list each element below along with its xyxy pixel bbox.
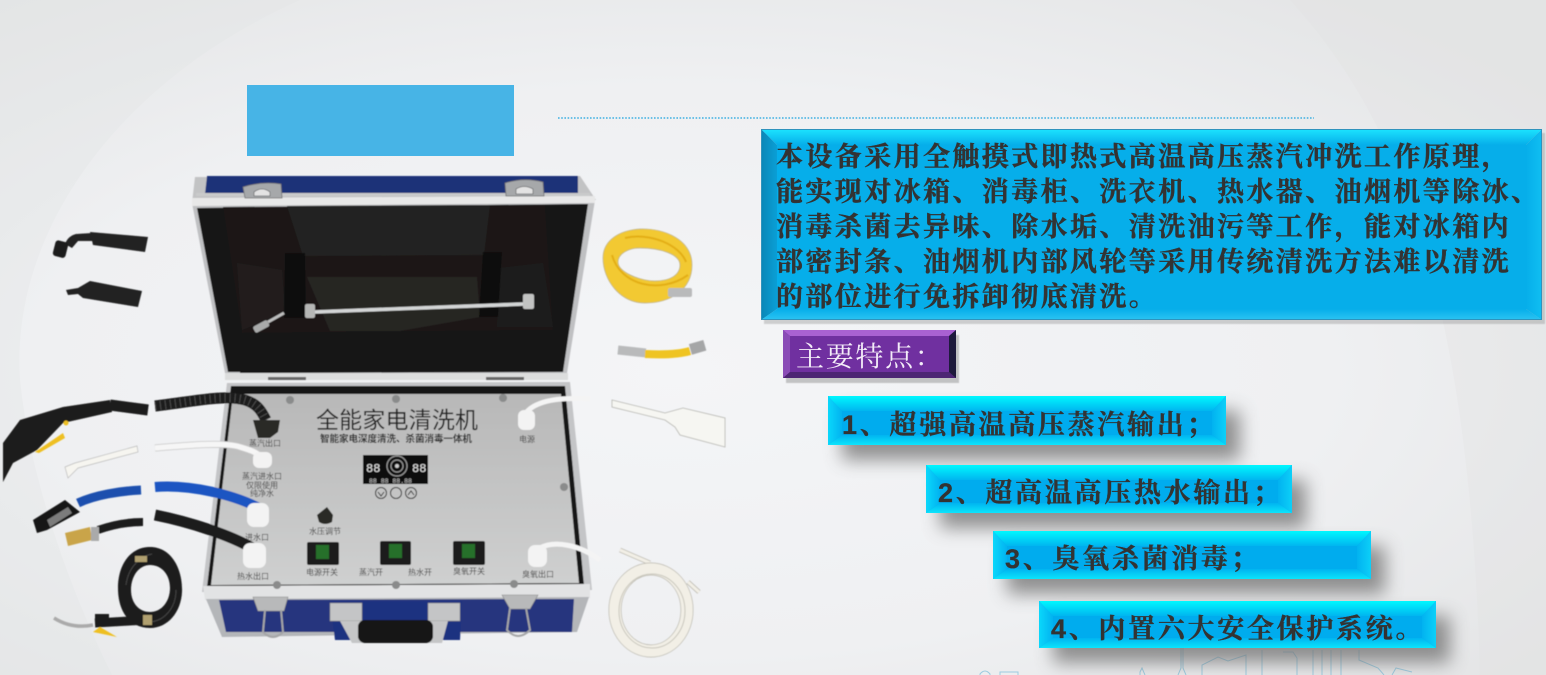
panel labels: 蒸汽出口 xyxy=(249,438,281,448)
heading: main features xyxy=(783,330,959,383)
panel: description xyxy=(761,129,1545,324)
LCD display: 88 88 88.88 xyxy=(369,478,412,485)
feature 1 xyxy=(828,396,1240,460)
feature 4: 4、内置六大安全保护系统。 xyxy=(1051,614,1425,644)
hoses into panel xyxy=(155,398,600,560)
accessory: water filter with blue hose xyxy=(33,490,141,533)
feature 3 xyxy=(993,531,1385,594)
panel labels: 电源 xyxy=(519,434,535,444)
water pressure knob xyxy=(317,507,333,524)
LCD display xyxy=(363,455,428,485)
feature 2: 2、超高温高压热水输出； xyxy=(938,477,1282,508)
panel labels: 仅限使用 xyxy=(246,480,278,490)
panel labels: 臭氧开关 xyxy=(453,566,485,576)
hose connectors xyxy=(243,410,547,568)
screws xyxy=(273,394,568,589)
LCD display: 88 xyxy=(412,462,426,476)
description text: 的部位进行免拆卸彻底清洗。 xyxy=(776,282,1158,312)
panel labels: 臭氧出口 xyxy=(522,569,554,579)
panel labels: 进水口 xyxy=(245,532,269,542)
panel labels: 热水开 xyxy=(408,567,432,577)
accessory: brass quick connector xyxy=(65,522,143,546)
panel labels: 热水出口 xyxy=(237,571,269,581)
accessory: short yellow hose xyxy=(617,340,706,357)
accessory: yellow hose coil xyxy=(603,229,692,303)
city skyline xyxy=(980,648,1412,675)
feature 2 xyxy=(926,465,1306,528)
panel labels: 水压调节 xyxy=(309,526,341,536)
accessory: white flat nozzle xyxy=(65,446,138,478)
steam wand rod xyxy=(253,294,534,333)
description text: 部密封条、油烟机内部风轮等采用传统清洗方法难以清洗 xyxy=(776,246,1511,277)
accessory: right-angle nozzle xyxy=(52,232,148,258)
panel labels xyxy=(237,434,554,581)
machine title: 全能家电清洗机 xyxy=(316,407,478,433)
lid of case xyxy=(192,176,596,373)
accessory: steam gun xyxy=(3,400,148,482)
hinge bar xyxy=(225,373,568,380)
accessory: flat nozzle xyxy=(66,281,142,307)
dotted rule xyxy=(558,117,1314,119)
accessory: clear tubing coil xyxy=(615,550,699,651)
control buttons xyxy=(376,488,416,498)
machine subtitle: 智能家电深度清洗、杀菌消毒一体机 xyxy=(320,433,472,445)
accessory: coiled hose spray gun xyxy=(54,547,182,637)
panel labels: 蒸汽开 xyxy=(359,567,383,577)
blue title block xyxy=(247,85,514,156)
LCD display: 88 xyxy=(366,462,380,476)
panel labels: 电源开关 xyxy=(306,567,338,577)
feature 3: 3、臭氧杀菌消毒； xyxy=(1005,544,1260,574)
description text: 本设备采用全触摸式即热式高温高压蒸汽冲洗工作原理， xyxy=(776,141,1511,173)
latches and handle xyxy=(253,595,538,643)
feature 4 xyxy=(1039,601,1450,663)
description text: 能实现对冰箱、消毒柜、洗衣机、热水器、油烟机等除冰、 xyxy=(776,176,1540,207)
velcro straps xyxy=(284,253,306,318)
description text: 消毒杀菌去异味、除水垢、清洗油污等工作，能对冰箱内 xyxy=(776,212,1511,243)
description text xyxy=(776,141,1540,312)
rocker switches xyxy=(307,541,485,565)
base of case xyxy=(202,382,592,640)
panel labels: 纯净水 xyxy=(250,488,274,498)
heading: main features: 主要特点： xyxy=(796,341,945,373)
accessory: white flat brush xyxy=(612,400,725,447)
product photo: cleaning machine in open case xyxy=(3,176,725,651)
lid hasps xyxy=(243,180,544,198)
panel labels: 蒸汽进水口 xyxy=(242,471,282,481)
feature 1: 1、超强高温高压蒸汽输出； xyxy=(842,409,1216,440)
